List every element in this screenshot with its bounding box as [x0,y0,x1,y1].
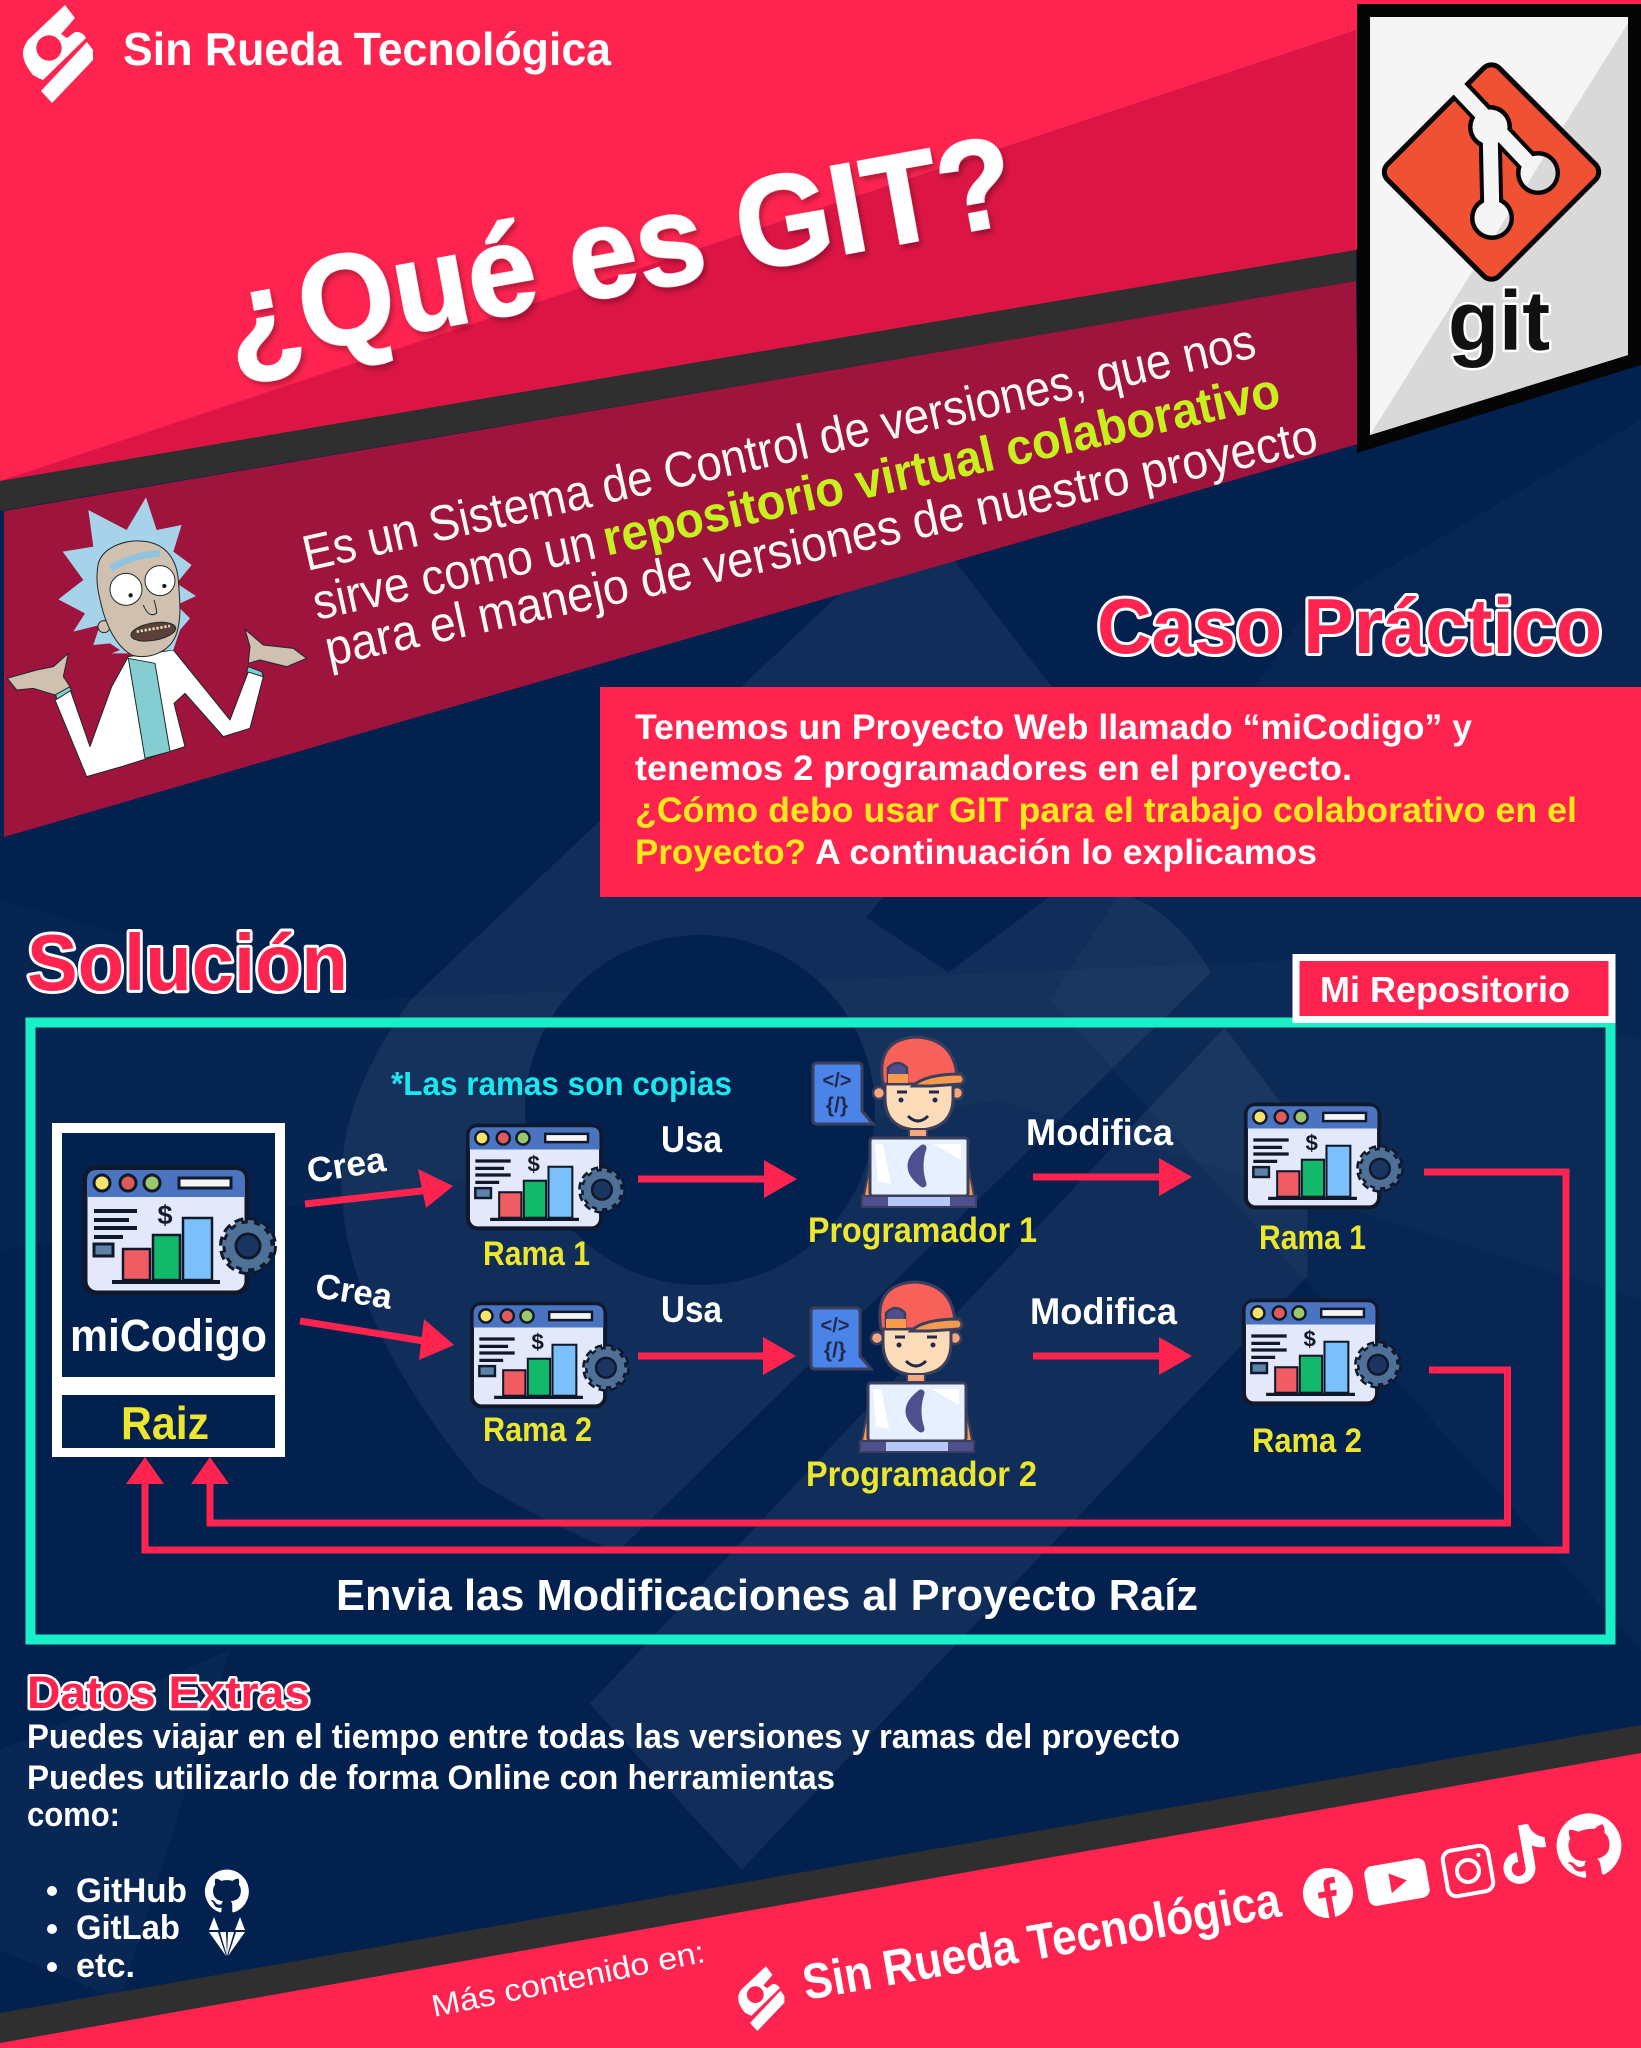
icon: Rama 2 modified [1244,1301,1398,1403]
icon: GitLab [209,1917,245,1956]
description text: sirve como un [307,514,601,631]
arrow: Usa 1 [638,1160,797,1198]
brand name: Sin Rueda Tecnológica [123,23,611,75]
label: Raiz: Raiz [121,1397,209,1449]
burgundy description banner [4,281,1358,837]
label: Programador 2: Programador 2 [806,1455,1037,1494]
icon: Instagram [1441,1844,1495,1898]
text: extra facts: Puedes utilizarlo de forma Online con herramientas [27,1759,835,1797]
panel: practical case: Tenemos un Proyecto Web llamado “miCodigo” y [635,708,1473,747]
arrow: Modifica 1 [1033,1158,1192,1196]
arrow: Crea 2 [300,1319,454,1360]
label: Modifica 1: Modifica [1026,1112,1173,1153]
label: Usa 1: Usa [661,1119,722,1160]
note: branches are copies: *Las ramas son copias [391,1065,732,1102]
footer text: more content: Más contenido en: [428,1934,708,2024]
panel: repository frame [30,1022,1610,1640]
panel: practical case [600,687,1641,897]
panel: practical case: tenemos 2 programadores en el proyecto. [635,749,1352,788]
text: extra facts: Puedes viajar en el tiempo entre todas las versiones y ramas del proyecto [27,1718,1180,1756]
highlighted phrase: repositorio virtual colaborativo [597,362,1285,566]
icon: Programador 2 [811,1282,974,1452]
label: Programador 1: Programador 1 [808,1211,1037,1250]
git logo card [1357,4,1641,453]
label: Rama 2: Rama 2 [483,1411,592,1449]
description text: Es un Sistema de Control de versiones, que nos [297,313,1261,582]
panel: practical case: Proyecto? [635,833,806,872]
icon: git diamond [1380,60,1603,284]
caption: send modifications: Envia las Modificaciones al Proyecto Raíz [336,1571,1198,1620]
heading: Solución: Solución [27,918,348,1007]
arrow: Modifica 2 [1033,1337,1192,1375]
top red banner [0,0,1641,511]
icon: root window [85,1168,272,1293]
icon: TikTok [1496,1821,1552,1886]
text: extra facts: como: [27,1796,120,1834]
label: Rama 1: Rama 1 [483,1235,590,1273]
list: online tools: GitHub [76,1872,187,1910]
tag: Mi Repositorio: Mi Repositorio [1320,969,1570,1010]
list: online tools: etc. [76,1947,135,1985]
list: online tools: GitLab [76,1909,180,1947]
label: Crea 1: Crea [304,1140,389,1191]
root project box [52,1123,285,1457]
text: extra facts [27,1718,1180,1834]
label: miCodigo: miCodigo [70,1310,267,1361]
icon: GitHub [1551,1808,1626,1882]
description text: para el manejo de versiones de nuestro proyecto [319,408,1322,677]
label: Rama 1 modified: Rama 1 [1259,1219,1366,1257]
icon: Rama 2 [472,1304,626,1406]
heading: Caso Práctico: Caso Práctico [1097,582,1602,670]
icon: Rama 1 modified [1246,1105,1400,1207]
arrow: Crea 1 [305,1169,453,1208]
label: Usa 2: Usa [661,1289,722,1330]
icon: GitHub [205,1870,249,1912]
character: shrugging scientist [7,497,307,777]
heading: Datos Extras: Datos Extras [27,1667,310,1718]
footer logo [738,1966,784,2031]
panel: practical case: ¿Cómo debo usar GIT para el trabajo colaborativo en el [635,791,1577,830]
tag: Mi Repositorio [1296,958,1612,1020]
arrow: Usa 2 [638,1337,796,1375]
arrow: return from Rama 2 to root [191,1370,1508,1523]
title: ¿Qué es GIT? [212,109,1025,393]
icon: Rama 1 [468,1126,622,1228]
label: Rama 2 modified: Rama 2 [1252,1422,1362,1460]
arrow: return from Rama 1 to root [126,1172,1566,1550]
icon: YouTube [1363,1857,1431,1907]
git wordmark: git [1448,274,1550,368]
icon: Facebook [1299,1864,1357,1923]
footer brand name: Sin Rueda Tecnológica [798,1871,1286,2011]
label: Modifica 2: Modifica [1030,1291,1177,1332]
list: online tools [47,1872,187,1985]
panel: practical case: A continuación lo explicamos [815,833,1317,872]
logo: Sin Rueda Tecnológica [23,5,93,103]
footer banner [0,1725,1641,2048]
label: Crea 2: Crea [313,1266,395,1317]
icon: Programador 1 [813,1037,976,1207]
social icons [1299,1808,1626,1923]
